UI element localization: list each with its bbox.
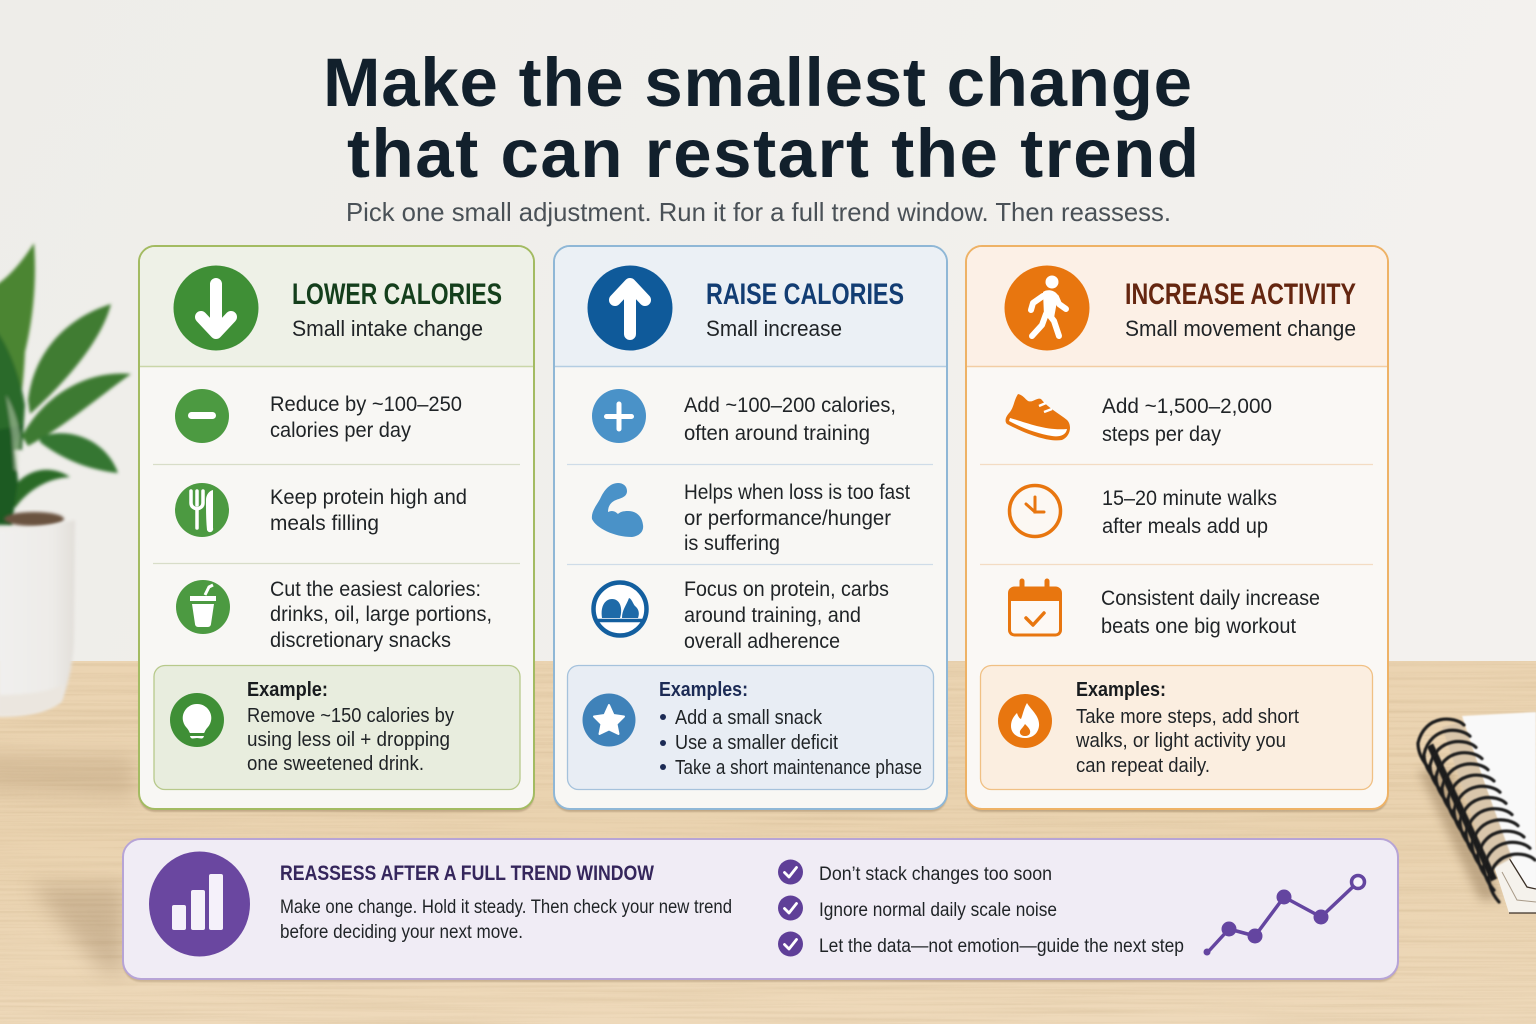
icon: light bulb <box>170 693 224 747</box>
icon: fork and knife <box>175 483 229 537</box>
text: examples list <box>659 679 922 779</box>
text: consistent: beats one big workout <box>1101 615 1296 638</box>
callout: examples <box>980 666 1372 790</box>
plant with white pot <box>0 243 131 716</box>
text: helps <box>684 481 910 555</box>
heading: increase activity: Small movement change <box>1125 316 1356 341</box>
text: add calories: Add ~100–200 calories, <box>684 394 896 417</box>
text: example: using less oil + dropping <box>247 729 450 751</box>
text: walks <box>1102 487 1277 538</box>
icon: clock <box>1010 486 1060 536</box>
text: consistent <box>1101 587 1320 638</box>
icon: up arrow <box>588 266 672 350</box>
text: example: one sweetened drink. <box>247 753 424 775</box>
background: wooden desk <box>0 661 1536 1024</box>
subtitle: Pick one small adjustment. Run it for a full trend window. Then reassess. <box>346 197 1171 227</box>
icon: calendar <box>1009 581 1061 635</box>
text: steps <box>1102 395 1272 446</box>
icon: food plate <box>594 582 646 636</box>
text: helps: or performance/hunger <box>684 507 891 530</box>
text: protein: meals filling <box>270 512 379 535</box>
icon: drink cup <box>176 580 230 634</box>
text: focus <box>684 578 889 653</box>
text: reassess body: Make one change. Hold it steady. Then check your new trend <box>280 897 732 918</box>
heading: increase activity: INCREASE ACTIVITY <box>1125 278 1356 311</box>
text: reassess body <box>280 897 732 943</box>
text: examples: can repeat daily. <box>1076 755 1210 777</box>
icon: flame <box>998 694 1052 748</box>
text: reassess body: before deciding your next move. <box>280 922 523 943</box>
text: add calories: often around training <box>684 422 870 445</box>
icon: running shoe <box>1006 394 1070 440</box>
text: steps: Add ~1,500–2,000 <box>1102 395 1272 418</box>
icon: walking person <box>1004 266 1090 350</box>
heading: increase activity <box>1125 278 1356 341</box>
text: easiest calories: discretionary snacks <box>270 629 451 652</box>
text: protein <box>270 486 467 535</box>
text: walks: 15–20 minute walks <box>1102 487 1277 510</box>
checklist: Let the data—not emotion—guide the next step <box>819 936 1184 957</box>
text: steps: steps per day <box>1102 423 1221 446</box>
text: reduce <box>270 393 462 442</box>
icon: plus <box>592 389 646 443</box>
notebook with spiral binding <box>1418 712 1536 913</box>
soil <box>4 512 64 526</box>
text: focus: around training, and <box>684 604 861 627</box>
text: focus: overall adherence <box>684 630 840 653</box>
text: easiest calories: drinks, oil, large portions, <box>270 603 492 626</box>
callout: example <box>154 666 520 790</box>
text: examples list: Use a smaller deficit <box>675 732 838 754</box>
icon: star <box>582 694 636 746</box>
text: example <box>247 679 454 775</box>
heading: raise calories: Small increase <box>706 316 842 341</box>
text: examples: Take more steps, add short <box>1076 706 1299 728</box>
text: examples list: Examples: <box>659 679 748 701</box>
text: helps: is suffering <box>684 532 780 555</box>
text: reduce: calories per day <box>270 419 411 442</box>
background: wall <box>0 0 1536 664</box>
text: add calories <box>684 394 896 445</box>
checklist: Ignore normal daily scale noise <box>819 900 1057 921</box>
heading: raise calories <box>706 278 904 341</box>
text: examples: Examples: <box>1076 679 1166 701</box>
text: consistent: Consistent daily increase <box>1101 587 1320 610</box>
text: example: Remove ~150 calories by <box>247 705 454 727</box>
checklist <box>778 860 1184 957</box>
text: examples: walks, or light activity you <box>1075 730 1286 752</box>
icon: down arrow <box>174 266 258 350</box>
text: examples <box>1075 679 1299 777</box>
panel: increase activity <box>966 246 1388 812</box>
text: walks: after meals add up <box>1102 515 1268 538</box>
title <box>323 44 1199 192</box>
panel: raise calories <box>554 246 947 812</box>
checklist: Don’t stack changes too soon <box>819 864 1052 885</box>
title: Make the smallest change <box>323 44 1192 121</box>
icon: flexed bicep <box>592 483 643 537</box>
leaves <box>0 243 131 525</box>
line chart: rising trend <box>1204 876 1364 956</box>
title: that can restart the trend <box>347 115 1199 192</box>
heading: lower calories <box>292 278 502 341</box>
text: example: Example: <box>247 679 328 701</box>
panel: reassess after a full trend window <box>123 839 1398 982</box>
text: easiest calories: Cut the easiest calories: <box>270 578 481 601</box>
heading: lower calories: LOWER CALORIES <box>292 278 502 311</box>
text: focus: Focus on protein, carbs <box>684 578 889 601</box>
heading: reassess: REASSESS AFTER A FULL TREND WINDOW <box>280 862 654 885</box>
heading: raise calories: RAISE CALORIES <box>706 278 904 311</box>
callout: examples <box>568 666 934 790</box>
text: helps: Helps when loss is too fast <box>684 481 910 504</box>
panel: lower calories <box>139 246 534 812</box>
text: reduce: Reduce by ~100–250 <box>270 393 462 416</box>
icon: bar chart <box>149 852 250 956</box>
text: easiest calories <box>270 578 492 652</box>
text: examples list: Take a short maintenance phase <box>675 757 922 779</box>
text: examples list: Add a small snack <box>675 707 823 729</box>
text: protein: Keep protein high and <box>270 486 467 509</box>
heading: lower calories: Small intake change <box>292 316 483 341</box>
icon: minus <box>175 389 229 443</box>
pot <box>0 520 75 716</box>
